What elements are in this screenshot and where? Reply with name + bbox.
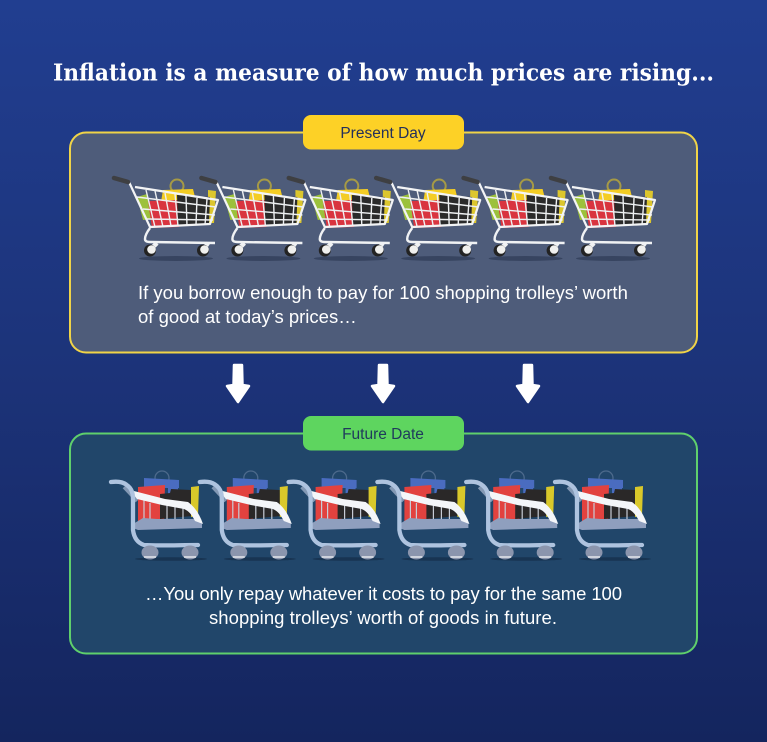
- shopping trolleys: faded: [111, 471, 651, 561]
- future date text: …You only repay whatever it costs to pay for the same 100: [145, 583, 622, 604]
- present day label: Present Day: [340, 125, 426, 142]
- present day text: of good at today’s prices…: [138, 306, 357, 327]
- panel: future date: [70, 416, 697, 654]
- panel: present day: [70, 115, 697, 352]
- arrow 1: [227, 365, 249, 402]
- future date text: shopping trolleys’ worth of goods in future.: [209, 607, 557, 628]
- present day label: [303, 115, 464, 150]
- shopping trolleys: full: [114, 178, 655, 261]
- future date label: Future Date: [342, 426, 424, 443]
- arrow 3: [517, 365, 539, 402]
- title: Inflation is a measure of how much prices are rising...: [53, 60, 714, 86]
- future date label: [303, 416, 464, 450]
- present day text: If you borrow enough to pay for 100 shopping trolleys’ worth: [138, 282, 628, 303]
- arrow 2: [372, 365, 394, 402]
